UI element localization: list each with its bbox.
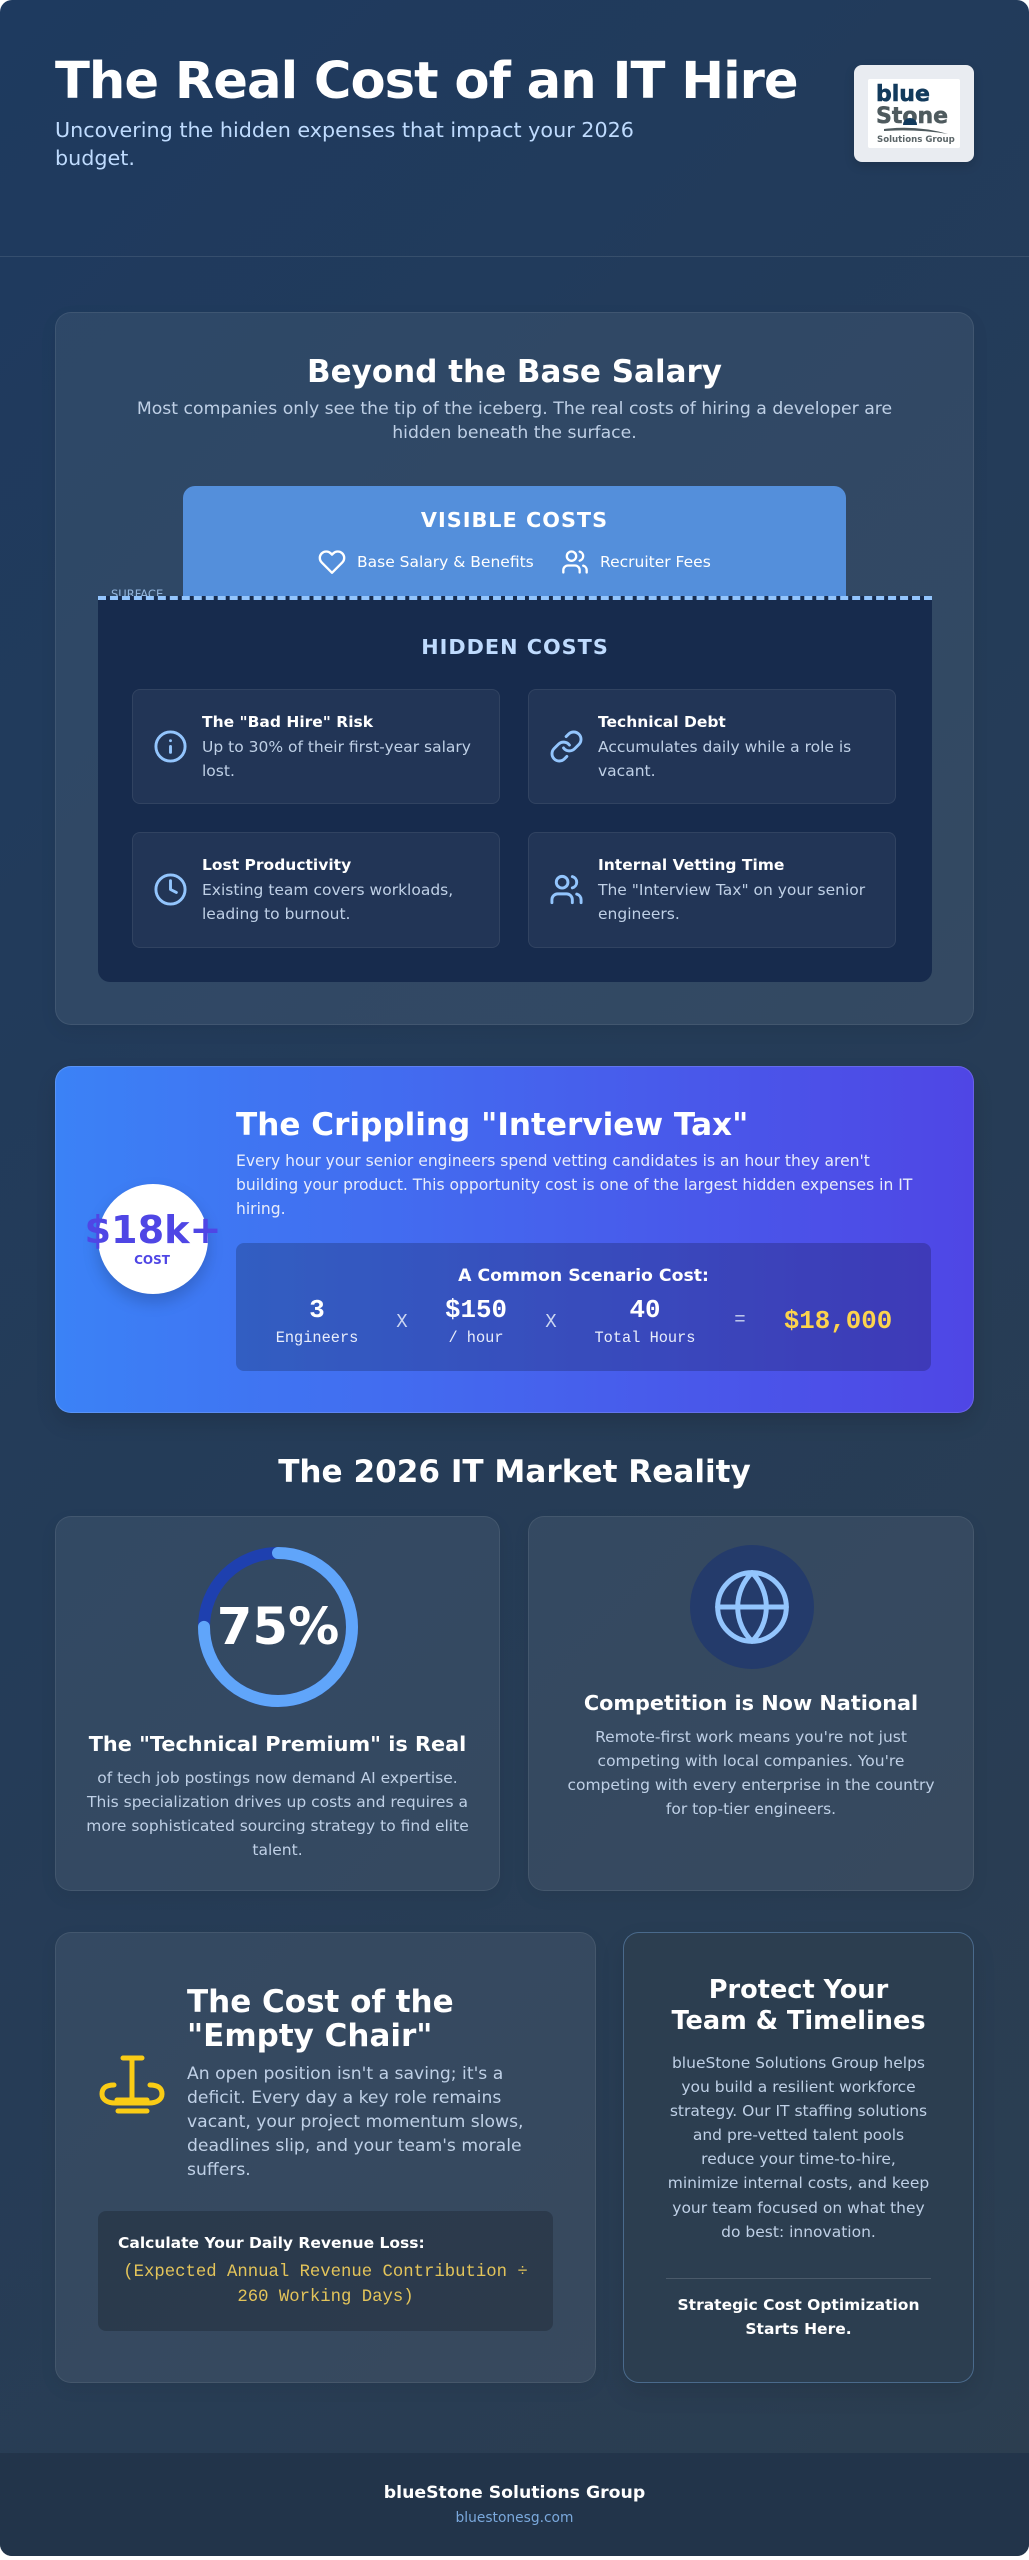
- value: hours: [594, 1296, 695, 1347]
- heading: The Cost of the: [187, 1984, 454, 2020]
- card text: vacant.: [598, 762, 656, 780]
- description: [668, 2054, 929, 2241]
- card text: The "Interview Tax" on your senior: [598, 881, 865, 899]
- panel: technical premium: [55, 1516, 500, 1891]
- operator x: X: [545, 1311, 557, 1333]
- card heading: The "Technical Premium" is Real: [89, 1732, 466, 1756]
- card heading: Competition is Now National: [584, 1691, 918, 1715]
- card text: [567, 1728, 935, 1818]
- value: rate: [445, 1296, 507, 1347]
- description: vacant, your project momentum slows,: [187, 2112, 524, 2132]
- card title: Internal Vetting Time: [598, 856, 784, 874]
- card text: of tech job postings now demand AI expertise.: [97, 1769, 458, 1787]
- icon: clock: [154, 874, 186, 906]
- number: $150: [445, 1296, 507, 1325]
- card title: The "Bad Hire" Risk: [202, 713, 373, 731]
- card text: This specialization drives up costs and requires a: [87, 1793, 468, 1811]
- scenario calculation box: [236, 1243, 931, 1371]
- heading: [671, 1975, 926, 2036]
- unit: / hour: [448, 1329, 504, 1347]
- card text: for top-tier engineers.: [666, 1800, 836, 1818]
- company name: blueStone Solutions Group: [384, 2483, 645, 2503]
- logo dome: [903, 118, 917, 125]
- cost figure: $18k+: [84, 1209, 222, 1253]
- description: [236, 1152, 912, 1218]
- card text: [86, 1769, 469, 1859]
- unit: Engineers: [276, 1329, 358, 1347]
- description: deadlines slip, and your team's morale: [187, 2136, 522, 2156]
- number: 3: [309, 1296, 325, 1325]
- card text: talent.: [252, 1841, 303, 1859]
- cost circle: [98, 1184, 208, 1294]
- subtitle: budget.: [55, 146, 135, 170]
- card text: [598, 881, 866, 923]
- visible item: base salary: Base Salary & Benefits: [357, 553, 534, 571]
- section heading: Beyond the Base Salary: [307, 354, 722, 390]
- card title: Lost Productivity: [202, 856, 351, 874]
- card text: Accumulates daily while a role is: [598, 738, 851, 756]
- panel: empty chair: [55, 1932, 596, 2383]
- heading: "Empty Chair": [187, 2018, 432, 2054]
- icon: link: [550, 730, 582, 762]
- card text: lost.: [202, 762, 235, 780]
- visible costs heading: VISIBLE COSTS: [421, 508, 608, 532]
- card text: Remote-first work means you're not just: [595, 1728, 907, 1746]
- closing statement: Strategic Cost Optimization: [678, 2296, 920, 2314]
- description: strategy. Our IT staffing solutions: [670, 2102, 927, 2120]
- panel: beyond the base salary: [55, 312, 974, 1025]
- heading: The Crippling "Interview Tax": [236, 1107, 748, 1143]
- description: [187, 2064, 524, 2180]
- heading: [187, 1984, 454, 2054]
- website: bluestonesg.com: [456, 2510, 573, 2526]
- card text: [202, 881, 453, 923]
- description: minimize internal costs, and keep: [668, 2174, 929, 2192]
- icon: users: [550, 874, 583, 904]
- section intro: [137, 399, 892, 443]
- logo tagline: Solutions Group: [877, 135, 955, 145]
- formula heading: Calculate Your Daily Revenue Loss:: [118, 2234, 425, 2252]
- formula: [123, 2263, 528, 2306]
- divider: [666, 2278, 931, 2279]
- icon: chair: [100, 2056, 164, 2114]
- heading: Team & Timelines: [671, 2006, 926, 2036]
- visible costs block: [183, 486, 846, 597]
- card: technical debt: [528, 689, 896, 804]
- card text: more sophisticated sourcing strategy to find elite: [86, 1817, 469, 1835]
- value: engineers: [276, 1296, 358, 1347]
- logo word: blue: blue: [876, 82, 930, 107]
- hidden costs heading: HIDDEN COSTS: [421, 635, 609, 659]
- operator x: X: [396, 1311, 408, 1333]
- card text: Existing team covers workloads,: [202, 881, 453, 899]
- section intro: hidden beneath the surface.: [392, 423, 637, 443]
- logo swoosh: [884, 128, 948, 134]
- description: your team focused on what they: [672, 2199, 925, 2217]
- formula: 260 Working Days): [237, 2288, 414, 2306]
- scenario heading: A Common Scenario Cost:: [458, 1266, 709, 1286]
- description: An open position isn't a saving; it's a: [187, 2064, 503, 2084]
- unit: Total Hours: [594, 1329, 695, 1347]
- hidden costs block: [98, 596, 932, 982]
- card: lost productivity: [132, 832, 500, 948]
- description: deficit. Every day a key role remains: [187, 2088, 501, 2108]
- panel: protect your team: [623, 1932, 974, 2383]
- cost label: COST: [134, 1253, 170, 1267]
- heading: Protect Your: [709, 1975, 888, 2005]
- visible item: recruiter fees: Recruiter Fees: [600, 553, 711, 571]
- card: bad hire risk: [132, 689, 500, 804]
- card text: Up to 30% of their first-year salary: [202, 738, 471, 756]
- description: and pre-vetted talent pools: [693, 2126, 904, 2144]
- description: building your product. This opportunity cost is one of the largest hidden expenses in IT: [236, 1176, 912, 1194]
- description: hiring.: [236, 1200, 286, 1218]
- icon: heart: [318, 550, 346, 574]
- footer: [0, 2453, 1029, 2556]
- main title: The Real Cost of an IT Hire: [55, 51, 798, 111]
- section heading: market reality: The 2026 IT Market Reality: [278, 1454, 751, 1490]
- formula: (Expected Annual Revenue Contribution ÷: [123, 2263, 528, 2282]
- card text: [598, 738, 851, 780]
- icon: globe in circle: [690, 1545, 814, 1669]
- formula box: [98, 2211, 553, 2331]
- logo word: Stone: Stone: [876, 104, 948, 129]
- section intro: Most companies only see the tip of the iceberg. The real costs of hiring a developer are: [137, 399, 892, 419]
- total: $18,000: [784, 1307, 892, 1336]
- icon: users: [562, 550, 588, 574]
- globe glyph: [715, 1570, 789, 1644]
- subtitle: Uncovering the hidden expenses that impact your 2026: [55, 118, 634, 142]
- surface label: SURFACE: [111, 587, 163, 601]
- description: do best: innovation.: [721, 2223, 876, 2241]
- number: 40: [630, 1296, 660, 1325]
- percentage: 75%: [217, 1597, 339, 1657]
- closing statement: [678, 2296, 920, 2338]
- closing statement: Starts Here.: [745, 2320, 852, 2338]
- card text: leading to burnout.: [202, 905, 350, 923]
- description: reduce your time-to-hire,: [701, 2150, 896, 2168]
- card text: competing with local companies. You're: [598, 1752, 904, 1770]
- progress ring: [198, 1547, 358, 1707]
- subtitle: [55, 118, 634, 170]
- panel: interview tax: [55, 1066, 974, 1413]
- logo image area: [868, 79, 960, 148]
- card text: engineers.: [598, 905, 680, 923]
- description: Every hour your senior engineers spend vetting candidates is an hour they aren't: [236, 1152, 870, 1170]
- panel: national competition: [528, 1516, 974, 1891]
- description: suffers.: [187, 2160, 251, 2180]
- description: blueStone Solutions Group helps: [672, 2054, 925, 2072]
- card text: competing with every enterprise in the country: [567, 1776, 935, 1794]
- card: internal vetting time: [528, 832, 896, 948]
- icon: info: [154, 730, 186, 762]
- header: [0, 0, 1029, 257]
- card text: [202, 738, 471, 780]
- operator equals: =: [734, 1309, 746, 1331]
- description: you build a resilient workforce: [681, 2078, 916, 2096]
- logo badge: [854, 65, 974, 162]
- card title: Technical Debt: [598, 713, 726, 731]
